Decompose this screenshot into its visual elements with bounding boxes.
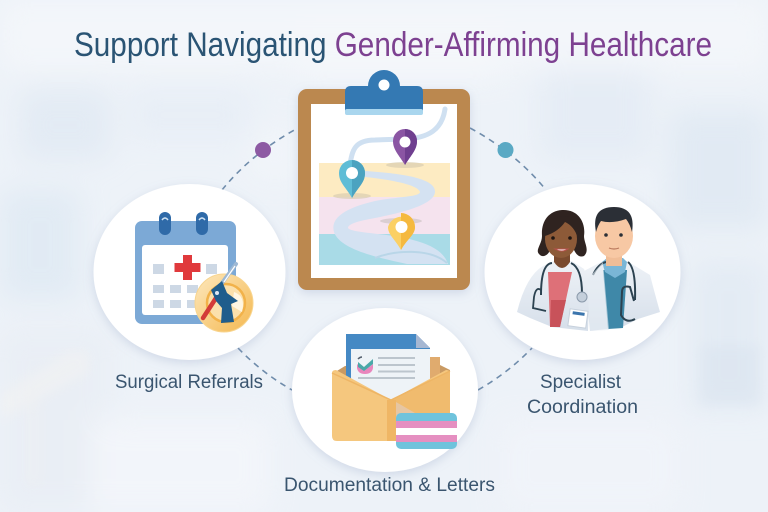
icon: calendar xyxy=(135,212,236,324)
dashed connector ring xyxy=(222,128,546,390)
label: specialist coordination: Specialist xyxy=(540,372,622,393)
panel: specialist coordination circle xyxy=(484,184,680,360)
icon: medal with surgical tool xyxy=(195,264,253,332)
pin: purple xyxy=(386,129,424,168)
node: teal dot xyxy=(498,142,514,158)
panel: documentation and letters circle xyxy=(292,308,478,472)
label: documentation and letters: Documentation & Letters xyxy=(284,475,495,496)
panel: clipboard with journey map xyxy=(298,70,470,290)
clipboard clip xyxy=(345,70,423,115)
icon: transgender pride flag card xyxy=(396,413,457,449)
icon: female doctor xyxy=(517,210,588,331)
map colour bands xyxy=(319,163,450,265)
pin: yellow xyxy=(380,213,422,250)
node: purple dot xyxy=(255,142,271,158)
clipboard paper xyxy=(311,104,457,278)
icon: male doctor xyxy=(584,207,660,331)
icon: open envelope with letter xyxy=(332,334,450,441)
title: Support Navigating Gender-Affirming Healthcare xyxy=(74,26,712,64)
label: specialist coordination xyxy=(527,372,638,418)
panel: surgical referrals circle xyxy=(94,184,286,360)
winding road xyxy=(333,109,448,264)
label: surgical referrals: Surgical Referrals xyxy=(115,372,263,393)
label: specialist coordination: Coordination xyxy=(527,397,638,418)
icon: small check badge xyxy=(357,357,373,374)
clipboard board xyxy=(298,89,470,290)
pin: teal xyxy=(333,160,371,199)
